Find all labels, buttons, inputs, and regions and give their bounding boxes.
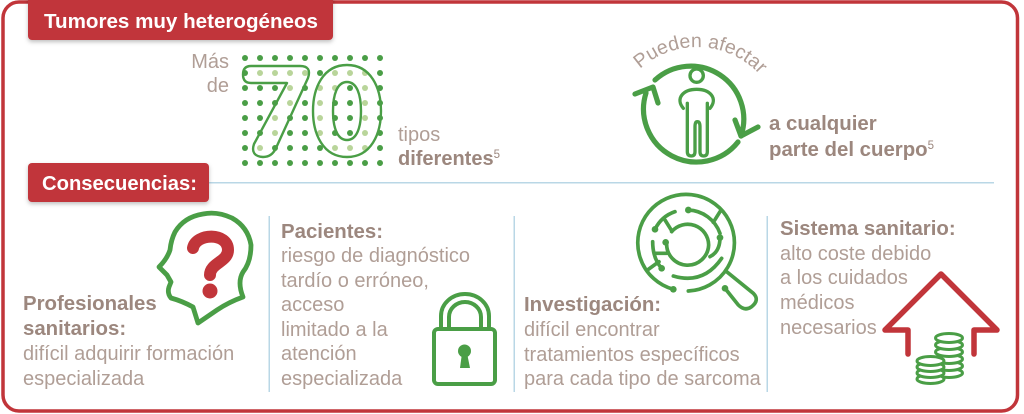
dot matrix [242,55,383,166]
text: Profesionales sanitarios: sanitarios: [23,318,126,340]
icon: person with cycle arrows [635,66,758,162]
text: a cualquier parte del cuerpo [769,113,934,161]
text: Sistema sanitario: alto coste debido [780,243,931,265]
text: Investigación: tratamientos específicos [524,344,740,366]
text: Sistema sanitario: Sistema sanitario: [780,218,956,240]
text: Sistema sanitario: médicos [780,292,854,314]
text: Pacientes: tardío o erróneo, [281,270,429,292]
text: Más de: Más [191,51,229,73]
text: a cualquier parte del cuerpo: parte del cuerpo [769,139,928,161]
icon: head with question mark [159,213,251,323]
text: tipos diferentes [398,124,500,170]
heading tag: Tumores muy heterogéneos [28,0,333,40]
text: a cualquier parte del cuerpo: 5 [928,140,934,152]
text: Pacientes: especializada [281,368,403,390]
text: Sistema sanitario: a los cuidados [780,267,908,289]
text: Más de: de [207,75,229,97]
icon: house with coins [885,274,997,384]
text: Profesionales sanitarios: Profesionales [23,293,157,315]
text: Investigación [524,294,762,390]
number 70 outline [243,65,381,157]
heading tag: Tumores muy heterogéneos: Tumores muy heterogéneos [44,11,318,33]
text: Pacientes [281,221,470,390]
text: Pacientes: limitado a la [281,319,389,341]
text: tipos diferentes: tipos [398,124,440,146]
column dividers [268,216,768,392]
text: Más de [191,51,229,97]
text: Sistema sanitario: necesarios [780,317,877,339]
text: Sistema sanitario [780,218,956,339]
text: Profesionales sanitarios [23,293,234,390]
text: Investigación: difícil encontrar [524,319,660,341]
divider line [209,182,994,184]
text: Pacientes: acceso [281,294,344,316]
heading tag: Consecuencias: Consecuencias: [42,173,197,195]
text: Pacientes: atención [281,343,357,365]
text: tipos diferentes: 5 [494,149,500,161]
text: Pacientes: Pacientes: [281,221,383,243]
text: tipos diferentes: diferentes [398,148,494,170]
text: Investigación: para cada tipo de sarcoma [524,368,762,390]
icon: padlock [434,294,495,384]
text: a cualquier parte del cuerpo: a cualquier [769,113,877,135]
text: Profesionales sanitarios: especializada [23,368,145,390]
curved text: Pueden afectar: Pueden afectar [632,35,767,72]
heading tag: Consecuencias [28,163,209,202]
text: Profesionales sanitarios: difícil adquirir formación [23,343,234,365]
text: Pacientes: riesgo de diagnóstico [281,245,470,267]
icon: magnifying glass with maze [638,194,756,309]
text: Investigación: Investigación: [524,294,661,316]
